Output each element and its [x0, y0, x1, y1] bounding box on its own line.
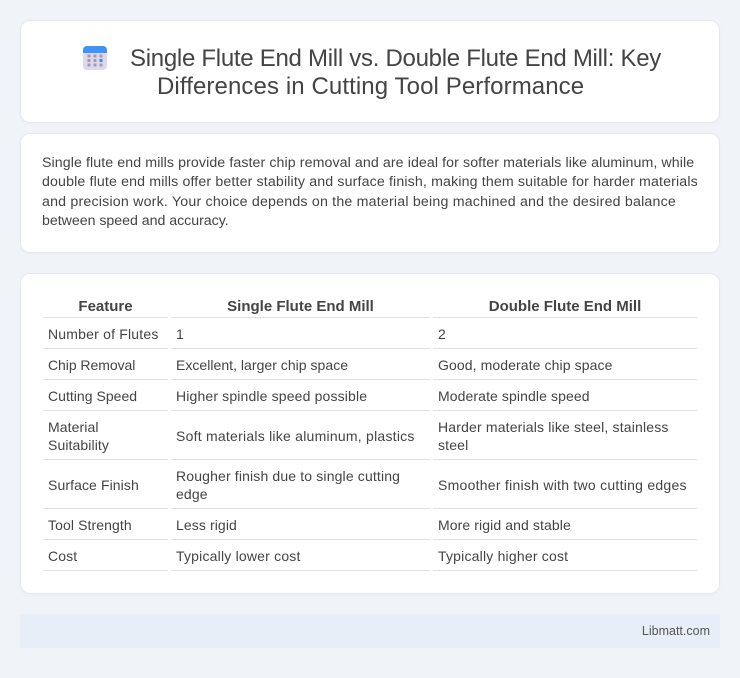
icon: calendar — [83, 46, 107, 70]
summary text: Single flute end mills provide faster chip removal and are ideal for softer materials like aluminum, while — [42, 155, 694, 171]
table: edge — [176, 486, 208, 502]
heading line 2: Differences in Cutting Tool Performance — [157, 73, 584, 100]
summary card — [20, 133, 720, 253]
row: material suitability — [48, 419, 109, 453]
table: Typically lower cost — [176, 548, 301, 564]
table: steel — [438, 437, 468, 453]
table header: Feature — [78, 298, 133, 315]
heading: Single Flute End Mill vs. Double Flute End Mill: Key — [130, 45, 661, 72]
table: Smoother finish with two cutting edges — [438, 477, 687, 493]
table: Single Flute End Mill — [227, 298, 374, 315]
footer bar — [20, 614, 720, 648]
table: 1 — [176, 326, 184, 342]
table: Soft materials like aluminum, plastics — [176, 428, 415, 444]
table: 2 — [438, 326, 446, 342]
row: cost: Cost — [48, 548, 77, 564]
table: Excellent, larger chip space — [176, 357, 348, 373]
row: tool strength: Tool Strength — [48, 517, 132, 533]
row: number of flutes: Number of Flutes — [48, 326, 159, 342]
table card — [20, 273, 720, 594]
table — [43, 298, 697, 571]
summary text: double flute end mills offer better stability and surface finish, making them suitable for harder materials — [42, 174, 698, 190]
title card — [20, 20, 720, 123]
row: surface finish: Surface Finish — [48, 477, 139, 493]
table: Double Flute End Mill — [489, 298, 641, 315]
table: Good, moderate chip space — [438, 357, 612, 373]
row: material suitability: Suitability — [48, 437, 109, 453]
table: Less rigid — [176, 517, 237, 533]
row: cutting speed: Cutting Speed — [48, 388, 137, 404]
table: Moderate spindle speed — [438, 388, 590, 404]
row: chip removal: Chip Removal — [48, 357, 135, 373]
row: material suitability: Material — [48, 419, 99, 435]
table: Typically higher cost — [438, 548, 568, 564]
table: Higher spindle speed possible — [176, 388, 367, 404]
table: Rougher finish due to single cutting — [176, 468, 400, 484]
summary text — [42, 155, 698, 229]
footer text: Libmatt.com — [642, 624, 710, 638]
table: Harder materials like steel, stainless — [438, 419, 669, 435]
summary text: and precision work. Your choice depends on the material being machined and the desired balance — [42, 194, 676, 210]
summary text: between speed and accuracy. — [42, 213, 229, 229]
table: More rigid and stable — [438, 517, 571, 533]
